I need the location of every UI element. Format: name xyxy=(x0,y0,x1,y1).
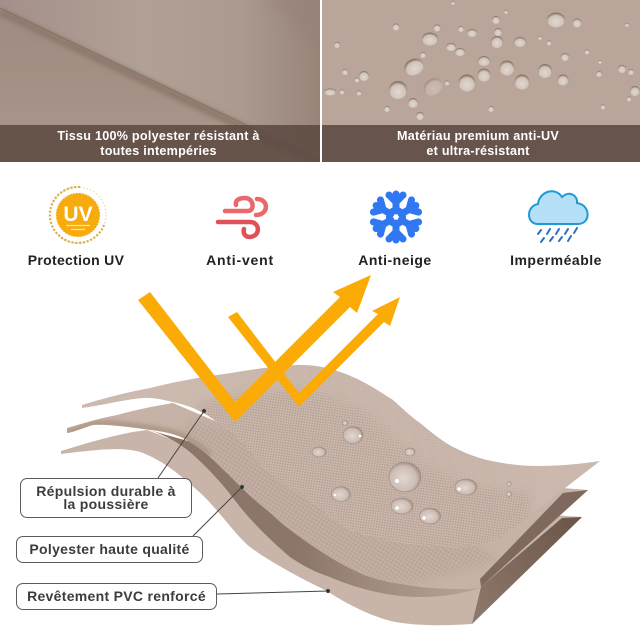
water droplets on fabric xyxy=(312,420,512,524)
middle layer: polyester xyxy=(67,400,588,600)
icon: UV badge xyxy=(50,187,106,243)
caption: premium material: et ultra-résistant xyxy=(426,144,530,158)
label: Anti-neige: Anti-neige xyxy=(358,252,432,268)
leader lines xyxy=(158,409,330,594)
callout: PVC coating xyxy=(16,583,217,610)
top layer: dust repellent xyxy=(82,360,610,560)
droplets xyxy=(324,1,640,120)
label: Imperméable: Imperméable xyxy=(510,252,602,268)
icon: UV badge: UV xyxy=(63,203,93,226)
fabric layers illustration xyxy=(50,187,610,625)
callout: polyester xyxy=(16,536,203,563)
bottom layer: PVC coating xyxy=(61,429,582,625)
icon: snowflake xyxy=(373,194,419,240)
callout: dust repellency: la poussière xyxy=(63,496,149,512)
arrow: small reflected UV ray xyxy=(228,297,400,407)
label: Protection UV: Protection UV xyxy=(28,252,124,268)
icon: rain cloud xyxy=(529,191,588,242)
callout: dust repellency: Répulsion durable à xyxy=(36,482,176,498)
caption: polyester fabric xyxy=(57,129,260,158)
arrow: large reflected UV ray xyxy=(138,275,371,422)
label: Anti-vent: Anti-vent xyxy=(206,252,274,268)
photo: water droplets on fabric xyxy=(322,0,640,162)
caption: polyester fabric: toutes intempéries xyxy=(100,144,217,158)
callout: PVC coating: Revêtement PVC renforcé xyxy=(27,588,206,604)
icon: wind xyxy=(218,198,266,237)
caption: premium material: Matériau premium anti-UV xyxy=(397,129,559,143)
callout: dust repellency xyxy=(20,478,192,518)
caption: premium material xyxy=(397,129,559,158)
caption: polyester fabric: Tissu 100% polyester résistant à xyxy=(57,129,260,143)
photo: folded fabric xyxy=(0,0,330,164)
callout: polyester: Polyester haute qualité xyxy=(29,541,190,557)
